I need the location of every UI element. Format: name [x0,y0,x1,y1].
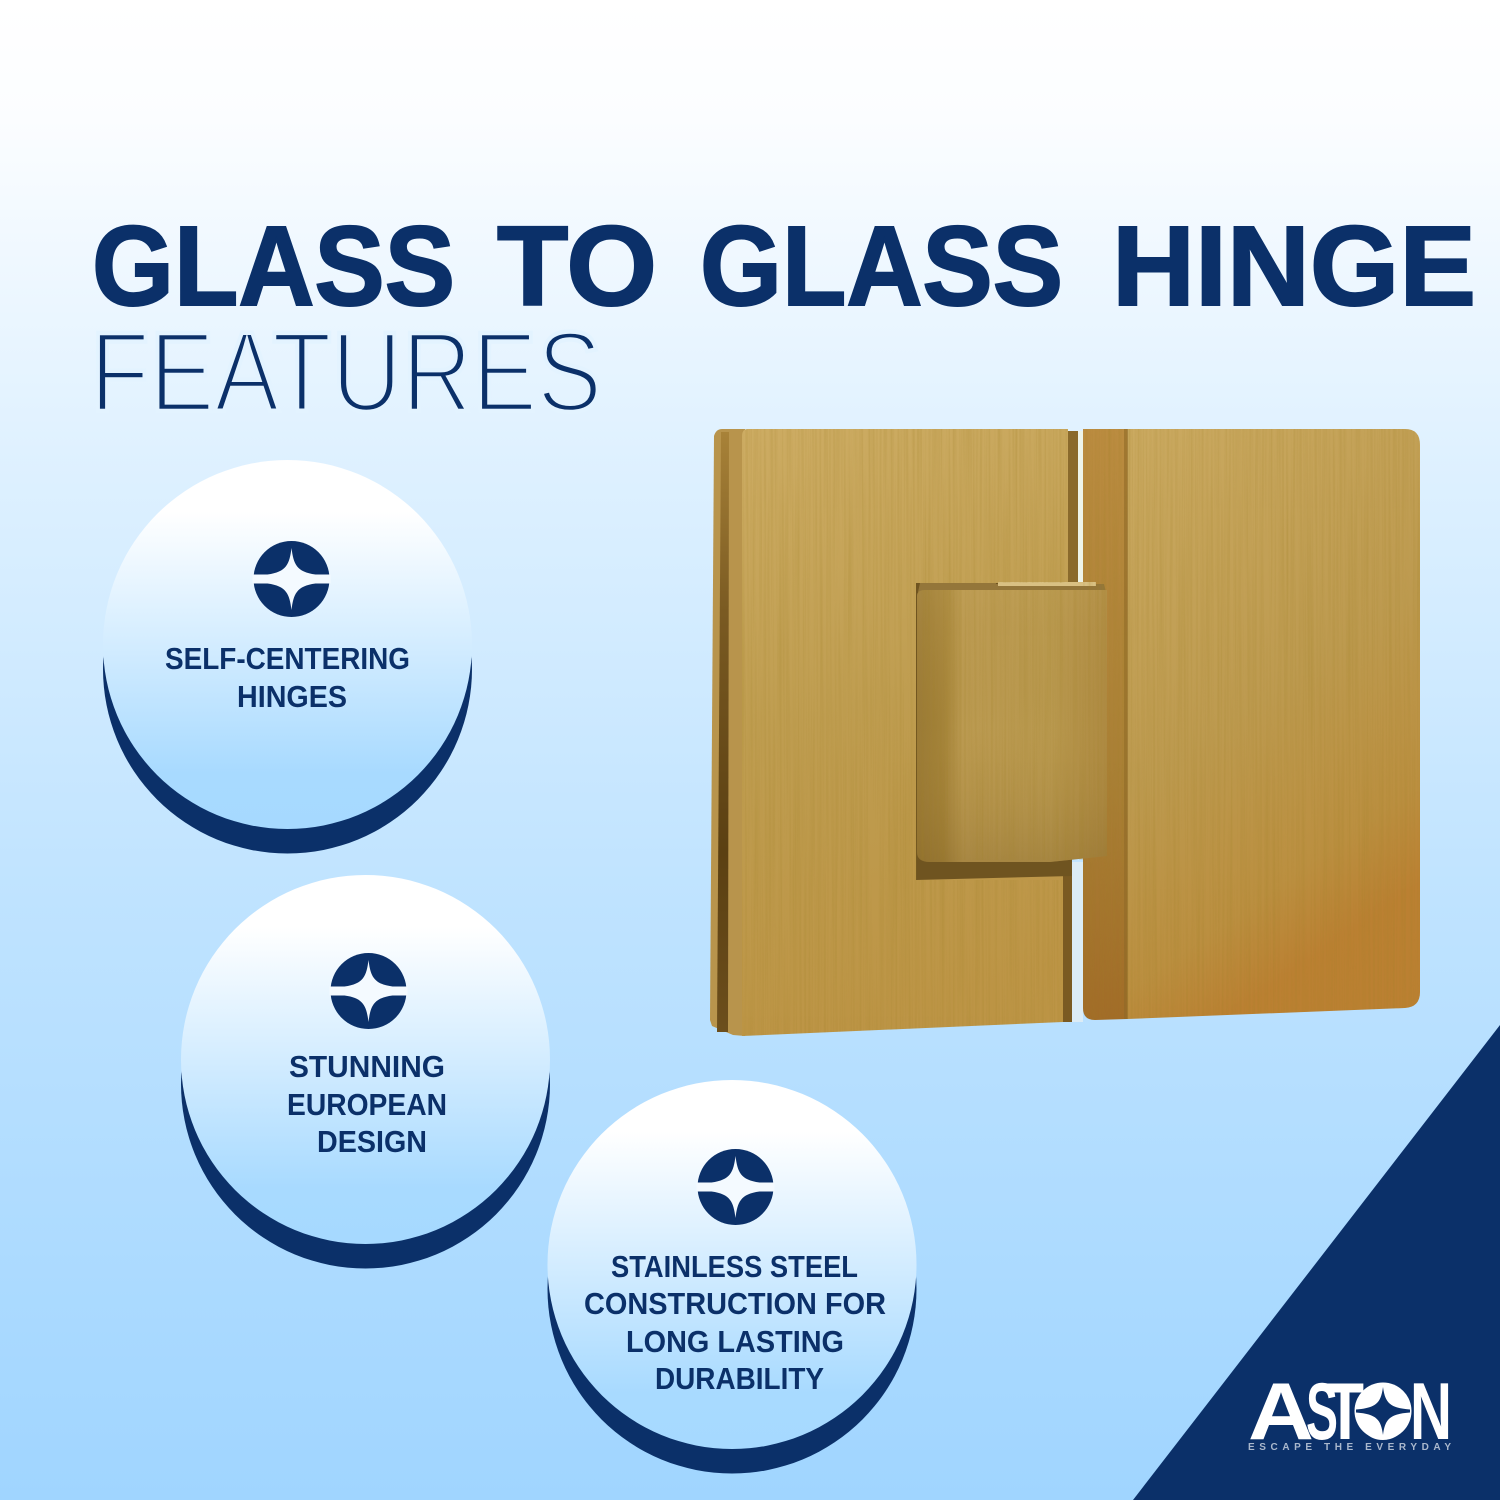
logo wordmark: T [1326,1367,1364,1457]
icon: star badge [696,1149,774,1225]
card disc [548,1080,916,1449]
card label: EUROPEAN [287,1087,447,1122]
card shadow crescent [181,900,550,1268]
logo tagline: ESCAPE THE EVERYDAY [1248,1442,1451,1453]
card label: LONG LASTING [626,1324,844,1359]
title [92,203,1476,329]
hinge hub top sliver [918,583,1106,592]
card label: HINGES [237,679,347,714]
logo wordmark: N [1410,1367,1452,1457]
logo star emblem [1354,1382,1412,1440]
card label: STAINLESS STEEL [611,1249,858,1284]
left plate dark edge [717,432,729,1032]
card label: STUNNING [289,1049,445,1084]
left plate slit [1068,431,1079,586]
card label [287,1049,447,1159]
icon: star badge [252,541,330,617]
title: GLASS [700,203,1063,329]
card disc [181,875,550,1244]
corner triangle [1133,1025,1500,1500]
title: TO [497,203,657,329]
right plate strip [1083,429,1127,1020]
logo wordmark: A [1248,1367,1314,1457]
logo wordmark: S [1306,1367,1338,1457]
logo: Aston [1248,1367,1452,1457]
card disc [103,460,472,829]
logo wordmark: O [1356,1367,1410,1457]
title: GLASS [92,203,455,329]
brushed metal texture [710,425,1425,1040]
left plate outer layer [710,429,745,1036]
card shadow crescent [548,1104,916,1474]
hinge product illustration [710,425,1425,1040]
title: HINGE [1112,203,1476,329]
hinge hub body [917,590,1107,862]
feature card: self-centering hinges [103,460,472,854]
card label [584,1249,886,1396]
card label: DURABILITY [655,1361,824,1396]
card shadow crescent [103,484,472,854]
card label [165,641,410,714]
hinge hub recess [916,583,1072,880]
logo wordmark [1248,1367,1452,1457]
feature card: stainless steel construction [548,1080,916,1474]
feature card: stunning european design [181,875,550,1268]
subtitle: FEATURES [90,309,602,435]
card label: SELF-CENTERING [165,641,410,676]
card label: DESIGN [317,1124,427,1159]
plate faces [742,429,1068,1036]
card label: CONSTRUCTION FOR [584,1286,886,1321]
icon: star badge [330,953,408,1029]
